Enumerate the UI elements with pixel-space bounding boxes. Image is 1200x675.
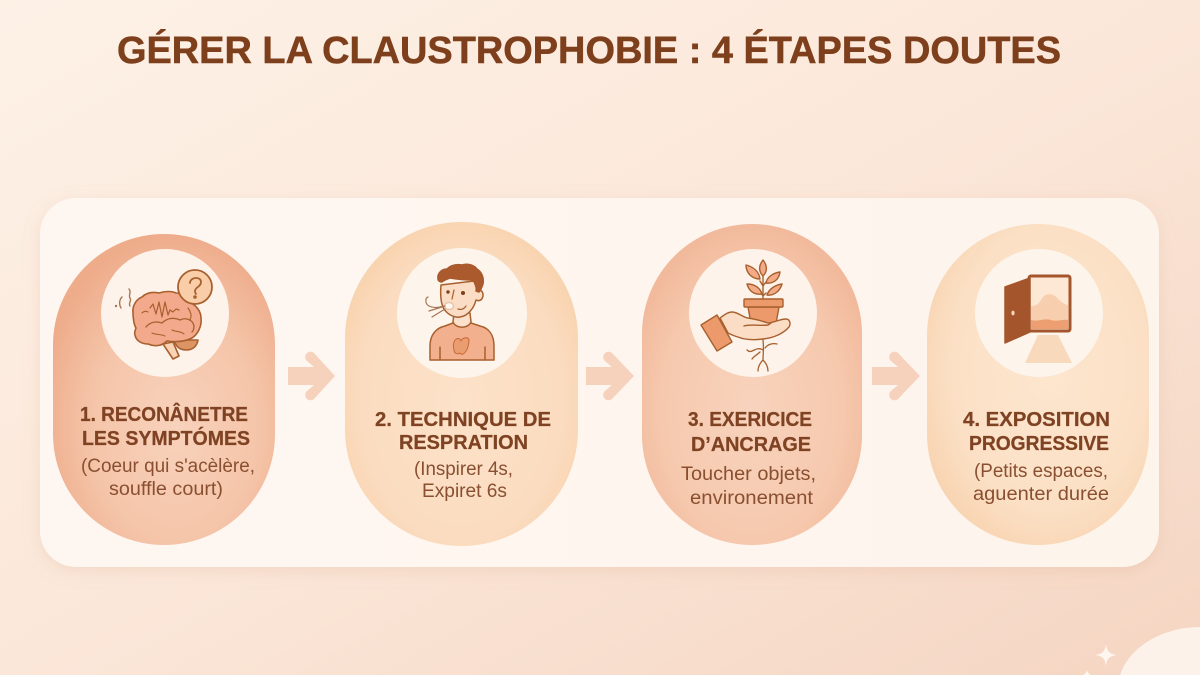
small sparkle: [1083, 670, 1091, 675]
step 1 description: (Coeur qui s'acèlère,: [81, 456, 255, 477]
panel: steps container: [40, 198, 1159, 567]
step 4 description: (Petits espaces,: [974, 461, 1108, 482]
step 1 description: souffle court): [109, 479, 223, 500]
step 3 description: environement: [690, 488, 814, 509]
step 4 heading: PROGRESSIVE: [969, 433, 1109, 455]
step 2 heading: RESPRATION: [399, 432, 528, 454]
icon: open door: [1005, 276, 1072, 363]
panel: step 1: [53, 234, 275, 545]
step 2 description: Expiret 6s: [422, 481, 507, 502]
arrow 2: [586, 352, 634, 400]
icon: person breathing: [426, 264, 494, 360]
step 4 description: aguenter durée: [973, 484, 1109, 505]
icon: hand holding plant: [701, 260, 790, 371]
step 1 heading: 1. RECONÂNETRE: [80, 402, 248, 426]
arrow 3: [872, 352, 920, 400]
title: GÉRER LA CLAUSTROPHOBIE : 4 ÉTAPES DOUTES: [117, 28, 1061, 72]
panel: step 3: [642, 224, 862, 545]
panel: step 4: [927, 224, 1149, 545]
step 2 description: (Inspirer 4s,: [414, 459, 513, 480]
arrow 1: [288, 352, 335, 400]
step 4 heading: 4. EXPOSITION: [963, 409, 1110, 431]
decorative corner blob: [1120, 627, 1200, 675]
icon: brain with question mark: [115, 270, 212, 359]
sparkle: [1095, 644, 1117, 666]
step 3 heading: 3. EXERICICE: [688, 409, 812, 431]
panel: step 2: [345, 222, 578, 546]
step 1 heading: LES SYMPTÓMES: [82, 426, 250, 450]
step 3 heading: D’ANCRAGE: [691, 434, 811, 456]
step 2 heading: 2. TECHNIQUE DE: [375, 409, 551, 431]
step 3 description: Toucher objets,: [681, 464, 816, 485]
